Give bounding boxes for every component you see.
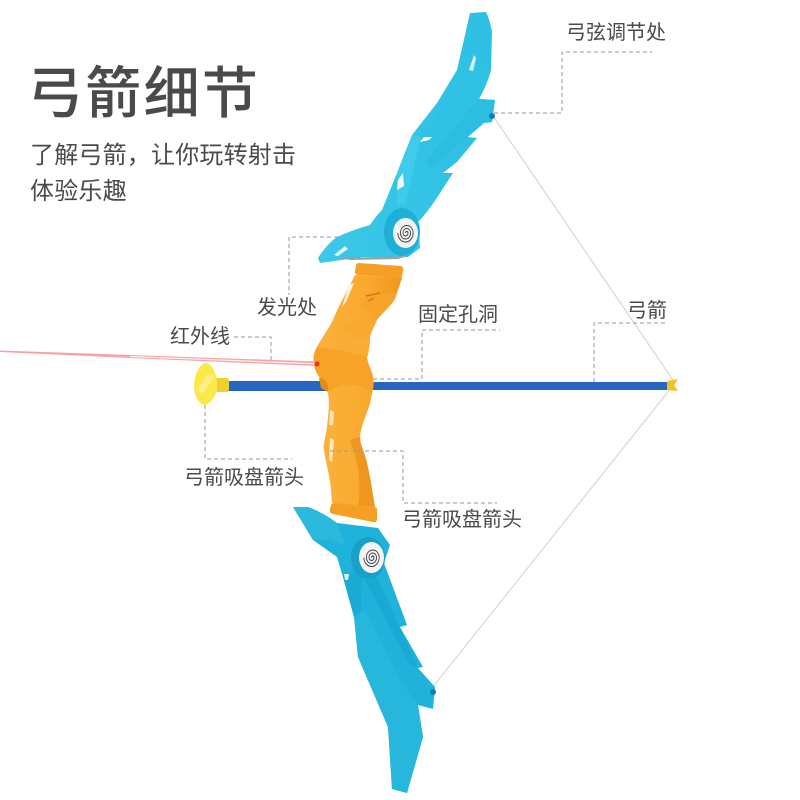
suction cup head <box>194 363 229 405</box>
callout: infrared: 红外线 <box>170 325 230 348</box>
arrow shaft right <box>368 382 667 390</box>
lower bow limb <box>293 507 435 793</box>
callout: suction tip left <box>184 405 304 489</box>
lower hub with spiral <box>351 537 385 579</box>
grip lower collar <box>330 503 377 522</box>
upper hub with spiral <box>334 208 420 260</box>
title: 弓箭细节 <box>27 62 260 125</box>
bow grip <box>314 263 403 522</box>
callout: suction tip right: 弓箭吸盘箭头 <box>402 508 522 531</box>
callout: fixing hole <box>373 303 500 379</box>
string adjuster knobs <box>430 113 495 695</box>
callout: string adjuster: 弓弦调节处 <box>566 21 666 44</box>
callout: arrow <box>594 299 667 382</box>
callout: infrared <box>170 325 271 362</box>
callout: glowing part: 发光处 <box>257 296 317 319</box>
arrow <box>194 363 678 405</box>
subtitle text: 体验乐趣 <box>30 178 127 205</box>
arrow shaft <box>228 381 328 391</box>
subtitle text: 了解弓箭，让你玩转射击 <box>30 142 296 169</box>
callout: glowing part <box>257 237 338 319</box>
bow strings <box>432 116 675 688</box>
laser beam <box>0 350 320 366</box>
subtitle text <box>30 142 296 205</box>
callout: suction tip right <box>330 451 522 531</box>
callout: suction tip left: 弓箭吸盘箭头 <box>184 466 304 489</box>
arrow hole <box>319 378 328 392</box>
arrow nock <box>667 379 678 391</box>
callout: arrow: 弓箭 <box>627 299 667 322</box>
callout: string adjuster <box>494 21 666 113</box>
grip upper collar <box>355 263 403 278</box>
upper bow limb <box>318 12 495 263</box>
callout: fixing hole: 固定孔洞 <box>418 303 498 326</box>
